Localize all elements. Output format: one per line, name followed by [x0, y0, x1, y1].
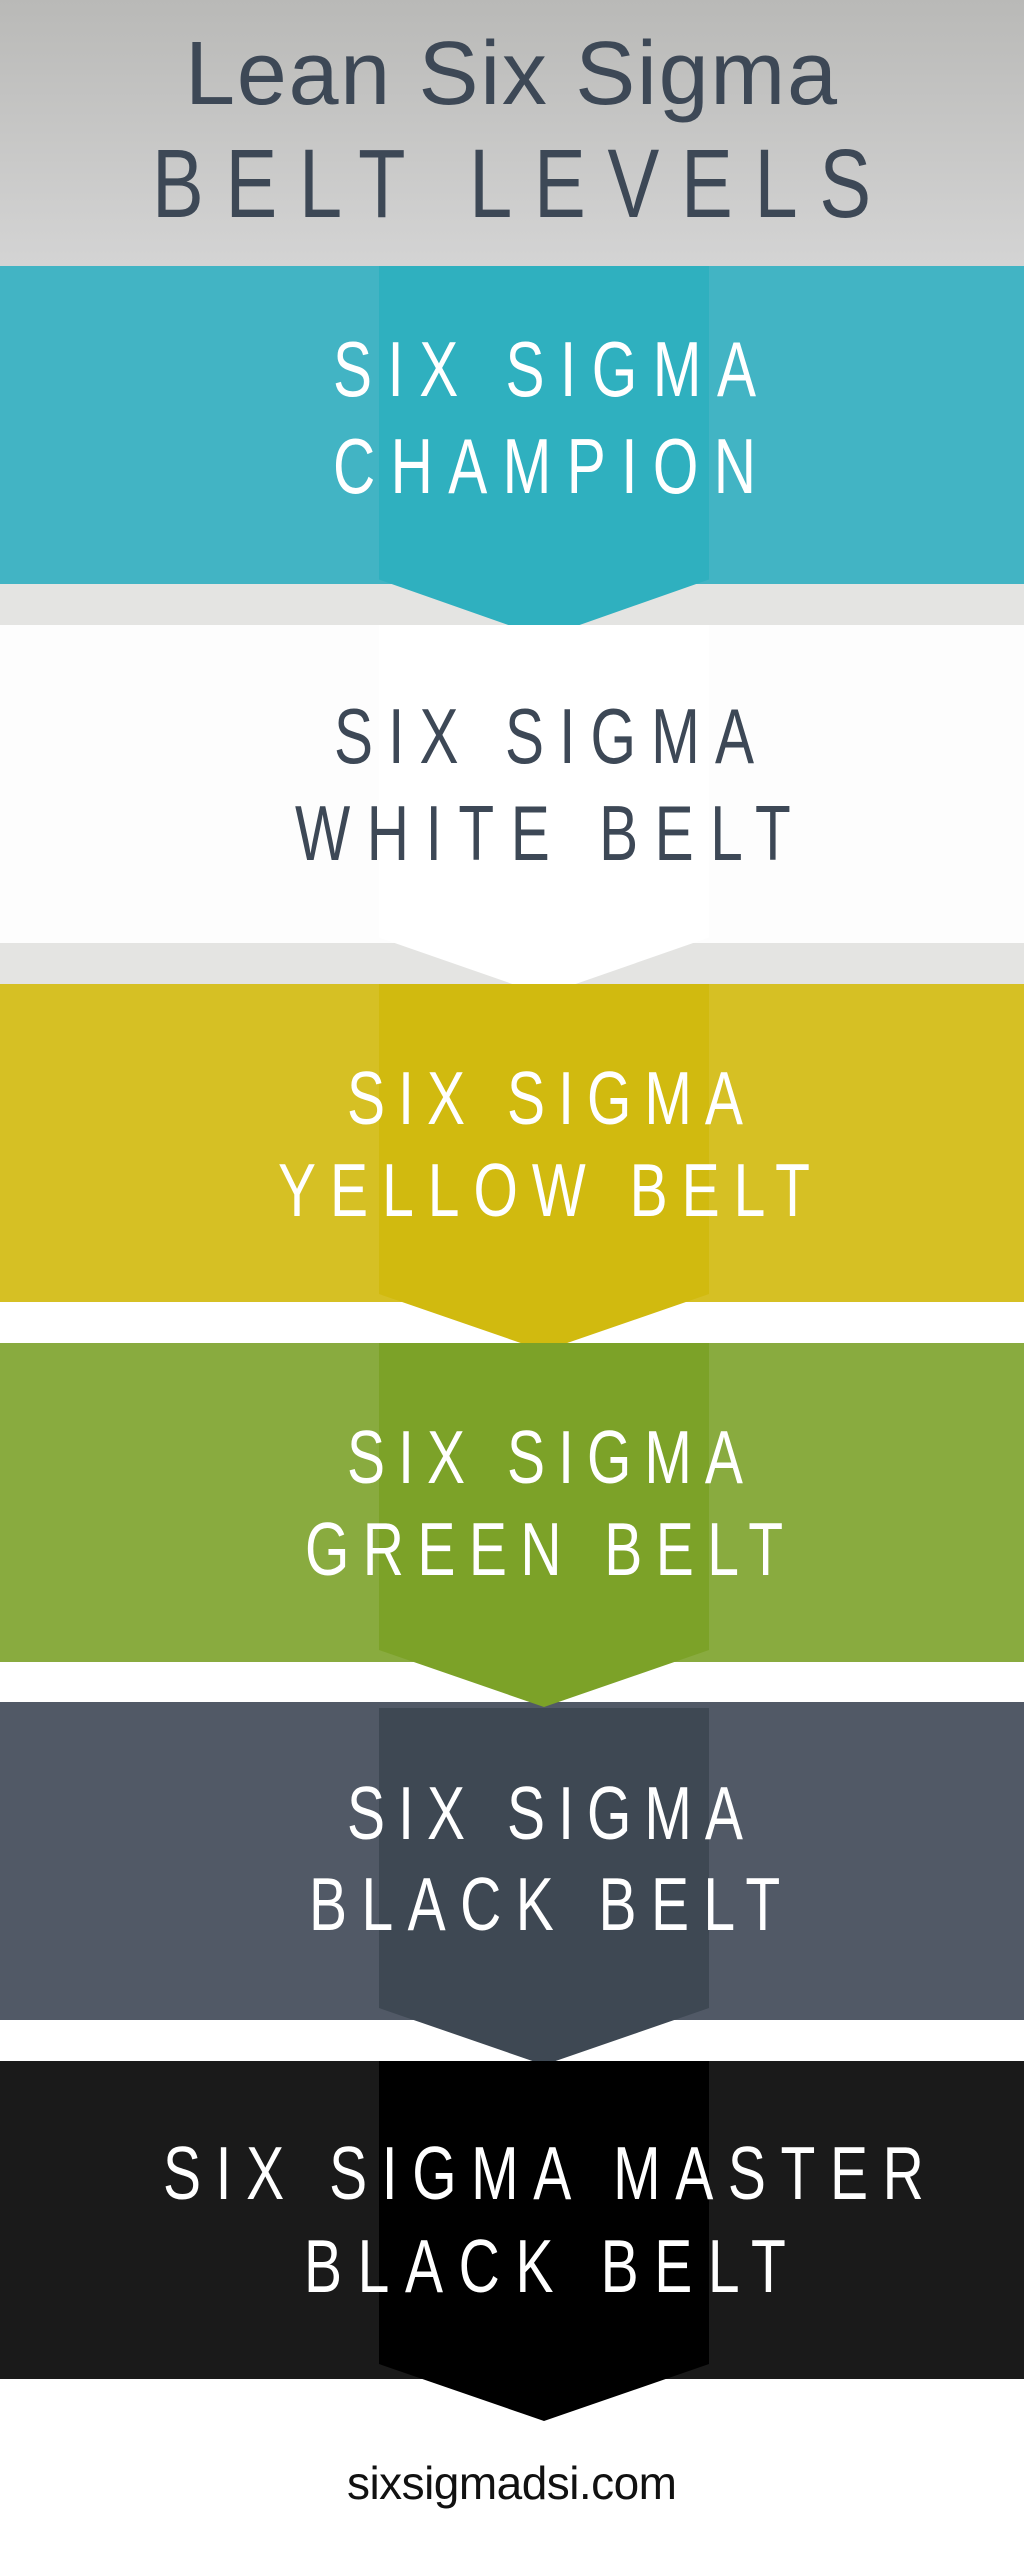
arrow: master black belt	[379, 2061, 709, 2421]
label: yellow belt	[278, 1058, 810, 1233]
title line: Lean Six Sigma: Lean Six Sigma	[185, 24, 838, 124]
label: yellow belt: YELLOW BELT	[278, 1150, 810, 1233]
label: master black belt: BLACK BELT	[304, 2226, 786, 2309]
arrow: white belt	[379, 625, 709, 995]
label: white belt: WHITE BELT	[295, 790, 791, 877]
panel: master black belt	[0, 2061, 1024, 2421]
label: white belt: SIX SIGMA	[334, 693, 754, 780]
label: master black belt	[163, 2133, 924, 2309]
footer website: sixsigmadsi.com	[347, 2457, 677, 2509]
arrow: yellow belt	[379, 984, 709, 1351]
grey strip under champion panel	[0, 584, 1024, 625]
label: green belt	[305, 1417, 783, 1592]
grey strip under white belt panel	[0, 943, 1024, 984]
panel: black belt	[0, 1702, 1024, 2065]
label: black belt	[309, 1773, 780, 1947]
panel: champion	[0, 266, 1024, 638]
panel: green belt	[0, 1343, 1024, 1662]
label: black belt: SIX SIGMA	[347, 1773, 743, 1856]
title line: BELT LEVELS: BELT LEVELS	[152, 129, 871, 238]
arrow: champion	[379, 266, 709, 638]
panel: yellow belt	[0, 984, 1024, 1351]
label: green belt: GREEN BELT	[305, 1509, 783, 1592]
label: champion: CHAMPION	[333, 423, 756, 510]
label: yellow belt: SIX SIGMA	[347, 1058, 743, 1141]
label: green belt: SIX SIGMA	[347, 1417, 743, 1500]
label: champion	[333, 326, 756, 510]
panel: white belt	[0, 625, 1024, 995]
label: white belt	[295, 693, 791, 877]
label: master black belt: SIX SIGMA MASTER	[163, 2133, 924, 2216]
band: green belt	[379, 1343, 709, 1650]
arrow: black belt	[379, 1708, 709, 2065]
label: black belt: BLACK BELT	[309, 1864, 780, 1947]
label: champion: SIX SIGMA	[333, 326, 756, 413]
header panel	[0, 0, 1024, 266]
arrow: green belt	[379, 1649, 709, 1707]
